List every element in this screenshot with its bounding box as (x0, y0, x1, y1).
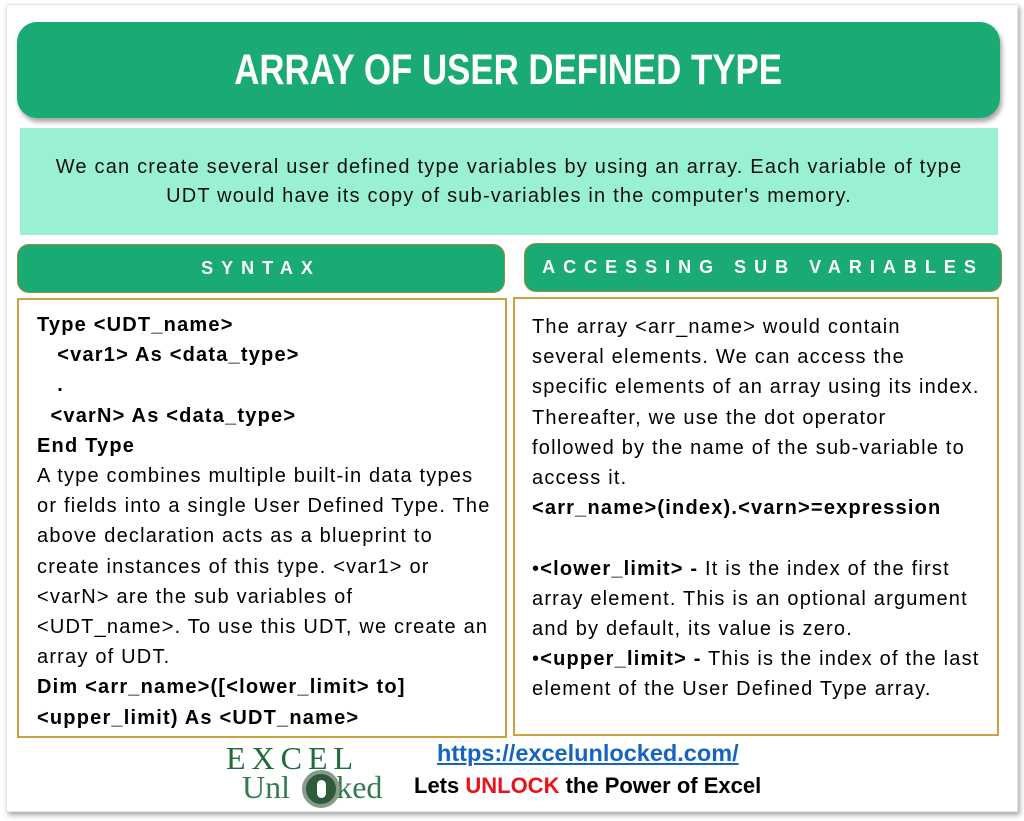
logo: Unl cked (242, 769, 382, 805)
panel: syntax: above declaration acts as a blueprint to (37, 525, 433, 547)
description (20, 128, 998, 235)
panel: accessing sub variables (513, 297, 999, 736)
panel: syntax: <upper_limit) As <UDT_name> (37, 707, 359, 729)
panel: accessing sub variables: array element. This is an optional argument (532, 588, 968, 610)
title (17, 22, 1000, 118)
heading: syntax (17, 244, 505, 293)
panel: accessing sub variables: Thereafter, we use the dot operator (532, 407, 886, 429)
panel: syntax (17, 298, 507, 738)
panel: syntax: . (57, 374, 64, 396)
panel: syntax: <UDT_name>. To use this UDT, we create an (37, 616, 488, 638)
panel: syntax: A type combines multiple built-in data types (37, 465, 473, 487)
tagline: Lets UNLOCK the Power of Excel (414, 773, 761, 798)
logo: EXCEL (226, 740, 359, 776)
link: https://excelunlocked.com/ (437, 740, 739, 766)
heading: accessing sub variables: ACCESSING SUB VARIABLES (542, 257, 984, 277)
panel: syntax: <var1> As <data_type> (57, 344, 300, 366)
panel: accessing sub variables: specific elements of an array using its index. (532, 376, 980, 398)
panel: syntax: array of UDT. (37, 646, 170, 668)
panel: syntax: Dim <arr_name>([<lower_limit> to] (37, 676, 406, 698)
icon: lock (302, 770, 340, 808)
panel: accessing sub variables: access it. (532, 467, 627, 489)
panel: syntax: <varN> As <data_type> (50, 405, 296, 427)
panel: syntax: <varN> are the sub variables of (37, 586, 353, 608)
heading: accessing sub variables (524, 243, 1002, 292)
panel: accessing sub variables: •<lower_limit> - It is the index of the first (532, 558, 950, 580)
panel: accessing sub variables: <arr_name>(index).<varn>=expression (532, 497, 941, 519)
description: We can create several user defined type variables by using an array. Each variable of type (56, 156, 962, 178)
panel: syntax: create instances of this type. <var1> or (37, 556, 430, 578)
panel: accessing sub variables: •<upper_limit> - This is the index of the last (532, 648, 980, 670)
panel: accessing sub variables: several elements. We can access the (532, 346, 905, 368)
panel: syntax: End Type (37, 435, 135, 457)
panel: syntax: or fields into a single User Defined Type. The (37, 495, 491, 517)
description: UDT would have its copy of sub-variables in the computer's memory. (166, 184, 852, 206)
panel: accessing sub variables: and by default, its value is zero. (532, 618, 853, 640)
panel: syntax: Type <UDT_name> (37, 314, 234, 336)
panel: accessing sub variables: followed by the name of the sub-variable to (532, 437, 965, 459)
panel: accessing sub variables: element of the User Defined Type array. (532, 678, 932, 700)
panel: accessing sub variables: The array <arr_name> would contain (532, 316, 901, 338)
heading: syntax: SYNTAX (201, 258, 321, 278)
title: ARRAY OF USER DEFINED TYPE (235, 46, 782, 94)
logo (226, 740, 382, 808)
